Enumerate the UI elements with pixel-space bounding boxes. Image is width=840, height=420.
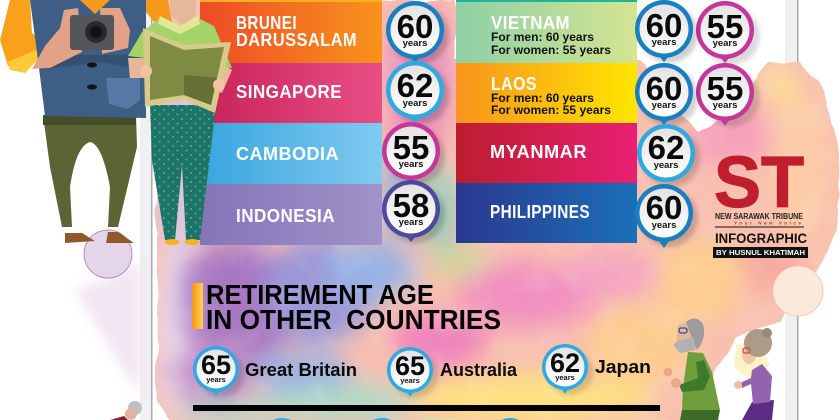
map <box>143 28 231 113</box>
woman arms <box>128 58 146 78</box>
watercolor bottom edge <box>172 404 702 420</box>
bar: Philippines <box>456 183 637 243</box>
old man jogging <box>664 318 720 420</box>
heading accent bar <box>192 283 203 329</box>
badge: Laos 55: 55 <box>707 70 743 107</box>
old man shirt <box>682 352 720 410</box>
label: Japan: Japan <box>595 357 651 377</box>
man pants <box>43 115 137 227</box>
badge: Brunei 60 <box>386 1 449 64</box>
label: Australia: Australia <box>440 360 518 380</box>
old man trousers <box>680 410 720 420</box>
badge: Japan 62: 62 <box>550 348 580 378</box>
badge: Laos 55: years <box>713 100 737 111</box>
background frame lines <box>140 0 798 420</box>
country labels: right column: PHILIPPINES <box>490 202 590 222</box>
bar: Indonesia <box>200 184 382 245</box>
country labels: right column: For women: 55 years <box>491 45 611 57</box>
old lady jogging <box>734 328 774 420</box>
pale peach blob right <box>773 266 823 316</box>
bar: Laos <box>456 63 637 123</box>
badge: Cambodia 55: 55 <box>393 129 429 166</box>
divider bar <box>193 405 660 411</box>
badge: Japan 62: years <box>555 373 575 382</box>
badge: Singapore 62 <box>386 61 449 124</box>
badge: Vietnam 60: 60 <box>646 7 682 44</box>
badge: Myanmar 62: years <box>654 160 678 171</box>
woman head and neck <box>170 0 196 27</box>
old lady pants <box>742 400 774 420</box>
man arm <box>32 8 82 69</box>
small figure bottom left <box>110 401 142 420</box>
heading: retirement age in other countries: RETIREMENT AGE <box>206 279 434 310</box>
country labels: left column: SINGAPORE <box>236 82 342 102</box>
badge: Philippines 60 <box>635 184 698 248</box>
country labels: left column: DARUSSALAM <box>236 30 357 50</box>
badge: Great Britain 65: 65 <box>201 350 231 380</box>
woman pants <box>150 105 216 240</box>
woman shoes <box>164 239 180 245</box>
man vest <box>30 0 146 118</box>
logo: New Sarawak Tribune: INFOGRAPHIC <box>715 231 807 246</box>
badge: Laos 60 <box>635 63 698 126</box>
badge: Australia 65: 65 <box>395 351 425 381</box>
logo: New Sarawak Tribune: NEW SARAWAK TRIBUNE <box>715 212 804 221</box>
badge: Cambodia 55: years <box>399 159 423 170</box>
badge: Japan 62 <box>542 344 593 395</box>
badge: Cambodia 55 <box>382 122 445 185</box>
buttons <box>87 62 97 68</box>
hands <box>140 65 152 77</box>
badge: Myanmar 62: 62 <box>648 129 684 166</box>
country labels: right column: For women: 55 years <box>491 105 611 117</box>
man with camera illustration <box>0 0 146 243</box>
woman shirt <box>128 18 232 68</box>
badge: Australia 65 <box>387 347 438 398</box>
purple watercolor splash left <box>75 230 140 395</box>
bar: Singapore <box>200 63 382 123</box>
badge: Australia 65: years <box>400 376 420 385</box>
country labels: right column: For men: 60 years <box>491 93 594 105</box>
label: Great Britain: Great Britain <box>245 360 357 380</box>
bars: left column <box>200 0 382 245</box>
man shirt collar <box>80 0 110 14</box>
badge: Vietnam 55: years <box>713 38 737 49</box>
badge: Vietnam 60 <box>635 0 698 63</box>
next row badge tops <box>273 418 519 420</box>
logo: New Sarawak Tribune: Your New Voice <box>734 220 801 226</box>
badge: Philippines 60: 60 <box>646 189 682 226</box>
badge: Great Britain 65 <box>193 346 244 397</box>
badge: Indonesia 58 <box>382 180 445 243</box>
country labels: right column <box>490 13 611 222</box>
country labels: right column: LAOS <box>491 74 537 94</box>
old man head <box>676 320 698 352</box>
old lady shirt <box>740 364 772 404</box>
badge: Laos 60: 60 <box>646 70 682 107</box>
other sleeve of man <box>146 0 172 32</box>
heading: retirement age in other countries <box>192 279 501 335</box>
badge: Laos 60: years <box>652 100 676 111</box>
badge: Laos 55 <box>696 63 760 127</box>
bar: Vietnam <box>456 2 637 63</box>
country labels: left column: BRUNEI <box>236 13 297 33</box>
badge: Singapore 62: years <box>403 98 427 109</box>
badge: Vietnam 60: years <box>652 37 676 48</box>
badge: Brunei 60: 60 <box>397 8 433 45</box>
pale watercolor patch <box>734 340 770 380</box>
bars: right column <box>456 0 637 243</box>
old man hands <box>664 368 672 376</box>
country labels: right column: For men: 60 years <box>491 32 594 44</box>
man shoes <box>65 233 95 243</box>
white area behind the joggers <box>700 322 787 420</box>
logo: New Sarawak Tribune: ST <box>714 143 804 223</box>
old lady hand <box>734 381 742 389</box>
badge: Great Britain 65: years <box>206 375 226 384</box>
bar: Brunei <box>200 2 382 63</box>
badge: Philippines 60: years <box>652 220 676 231</box>
old lady head <box>742 346 756 364</box>
country labels: left column <box>236 13 357 226</box>
old man arm <box>679 360 710 392</box>
badge: Singapore 62: 62 <box>397 67 433 104</box>
country labels: right column: VIETNAM <box>491 13 570 33</box>
country labels: left column: INDONESIA <box>236 206 335 226</box>
heading: retirement age in other countries: IN OTHER COUNTRIES <box>206 304 501 335</box>
camera <box>70 15 114 50</box>
badge: Brunei 60: years <box>403 38 427 49</box>
country labels: left column: CAMBODIA <box>236 144 339 164</box>
frame line below watercolor <box>785 322 798 420</box>
badge: Vietnam 55 <box>696 1 760 65</box>
bar: Cambodia <box>200 123 382 184</box>
logo: New Sarawak Tribune <box>713 143 808 258</box>
bar: Myanmar <box>456 123 637 183</box>
badge: Indonesia 58: years <box>399 217 423 228</box>
badge: Indonesia 58: 58 <box>393 187 429 224</box>
woman with map illustration <box>128 0 232 245</box>
man sleeve <box>0 0 47 73</box>
badge: Myanmar 62 <box>637 124 700 187</box>
country labels: right column: MYANMAR <box>490 142 587 162</box>
logo: New Sarawak Tribune: BY HUSNUL KHATIMAH <box>716 250 805 257</box>
badge: Vietnam 55: 55 <box>707 8 743 45</box>
